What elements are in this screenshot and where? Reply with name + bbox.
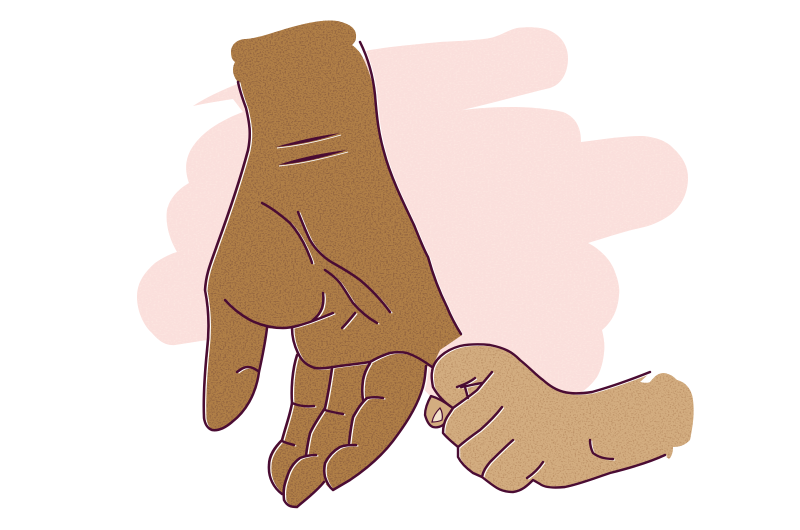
top edge [432, 344, 650, 393]
baby hand fill [432, 344, 694, 492]
baby hand outline and creases [432, 344, 665, 492]
wrist crease [590, 440, 613, 459]
adult hand fill [204, 20, 462, 507]
first finger [443, 372, 492, 477]
palm line C [325, 270, 377, 323]
baby thumb [425, 396, 453, 427]
thumb base crease [225, 300, 333, 328]
palm lower edge [292, 328, 432, 368]
thumb nail mark [457, 378, 482, 398]
thumb fold [433, 387, 453, 408]
left edge [204, 82, 267, 430]
fourth finger crease [527, 462, 543, 478]
palm small crease [342, 313, 355, 328]
wrist crease lower [278, 150, 347, 165]
adult hand [204, 20, 463, 508]
finger one [269, 355, 297, 494]
wrist crease upper [276, 133, 340, 147]
short palm crease [313, 293, 323, 320]
right edge [360, 42, 461, 334]
palm line A [262, 203, 312, 263]
finger two [306, 368, 332, 455]
baby hand [425, 344, 694, 493]
pink background blob [137, 27, 688, 400]
third finger crease [482, 440, 533, 492]
little finger crease [237, 367, 258, 372]
second finger crease [458, 407, 502, 447]
finger three [362, 363, 370, 400]
palm line B [298, 212, 390, 312]
bottom edge [533, 455, 665, 488]
adult hand outline and creases [204, 42, 461, 507]
